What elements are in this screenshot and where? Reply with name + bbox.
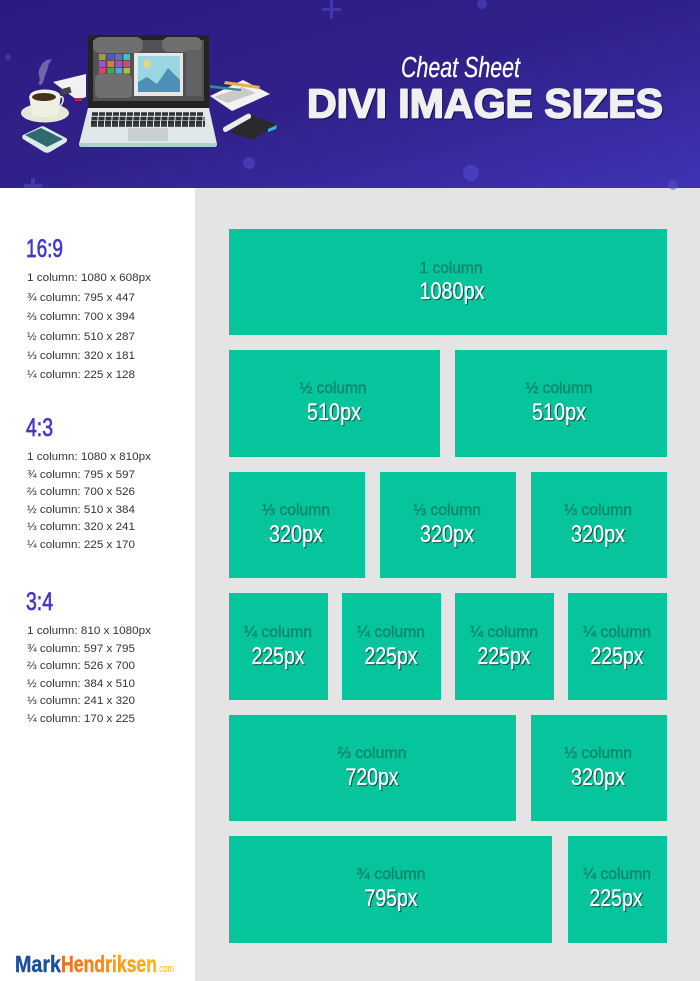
tile: 1/3 column first: ⅓ column: [262, 502, 330, 519]
list: 16:9 dimensions: ⅔ column: 700 x 394: [27, 311, 135, 323]
tile: 1/4 column beside 3/4: ¼ column: [583, 866, 651, 883]
tile: 1/3 column first: 320px: [269, 521, 323, 548]
panel: white sidebar background: [0, 188, 195, 981]
photo placeholder: [134, 53, 183, 96]
list: 16:9 dimensions: ¾ column: 795 x 447: [27, 292, 135, 304]
list: 4:3 dimensions: 1 column: 1080 x 810px: [27, 451, 151, 463]
list: 4:3 dimensions: ⅔ column: 700 x 526: [27, 486, 135, 498]
app icon grid: [99, 54, 130, 74]
icon: coffee cup: [21, 59, 69, 122]
tile: 1/4 column third: ¼ column: [470, 624, 538, 641]
panel: 4:3 sizes: [26, 414, 151, 551]
panel: 3:4 sizes: [26, 588, 151, 725]
tile: 1/3 column third: [531, 472, 667, 578]
list: 16:9 dimensions: ½ column: 510 x 287: [27, 331, 135, 343]
list: 3:4 dimensions: ⅔ column: 526 x 700: [27, 660, 135, 672]
illustration: laptop on desk: [21, 35, 277, 153]
tile: 1/2 column right: ½ column: [526, 380, 592, 397]
list: 3:4 dimensions: 1 column: 810 x 1080px: [27, 625, 151, 637]
list: 4:3 dimensions: ½ column: 510 x 384: [27, 504, 135, 516]
list: 4:3 dimensions: ¾ column: 795 x 597: [27, 469, 135, 481]
tile: 2/3 column: ⅔ column: [338, 745, 406, 762]
logo: MarkHendriksen.com: Hendriksen: [61, 951, 157, 977]
tile: 1/4 column second: ¼ column: [357, 624, 425, 641]
logo: MarkHendriksen.com: [15, 951, 174, 977]
tile: 1/3 column beside 2/3: 320px: [571, 764, 625, 791]
tile: 1/4 column first: [229, 593, 328, 700]
tile: 2/3 column: [229, 715, 516, 821]
icon: notepad: [53, 74, 86, 101]
tile: 1/2 column right: 510px: [532, 399, 586, 426]
list: 16:9 dimensions: ¼ column: 225 x 128: [27, 369, 135, 381]
list: 3:4 dimensions: ¾ column: 597 x 795: [27, 643, 135, 655]
icon: papers and pens: [210, 80, 270, 111]
tile: 1/4 column third: [455, 593, 554, 700]
heading: 16:9: 16:9: [26, 235, 63, 263]
tile: 1/2 column left: 510px: [307, 399, 361, 426]
keyboard: [91, 114, 205, 126]
tile: 1/3 column beside 2/3: ⅓ column: [564, 745, 632, 762]
list: 16:9 dimensions: [27, 272, 151, 381]
list: 16:9 dimensions: 1 column: 1080 x 608px: [27, 272, 151, 284]
tile: 1/2 column left: [229, 350, 440, 457]
list: 16:9 dimensions: ⅓ column: 320 x 181: [27, 350, 135, 362]
heading: DIVI IMAGE SIZES: DIVI IMAGE SIZES: [307, 80, 663, 126]
list: 4:3 dimensions: ¼ column: 225 x 170: [27, 539, 135, 551]
tile: 1/4 column first: ¼ column: [244, 624, 312, 641]
list: 3:4 dimensions: ⅓ column: 241 x 320: [27, 695, 135, 707]
tile: 3/4 column: ¾ column: [356, 866, 426, 883]
tile: 1/2 column left: ½ column: [300, 380, 366, 397]
icon: laptop: [79, 35, 217, 147]
tile: 1 column: 1 column: [420, 260, 482, 277]
icon: smartphone: [22, 126, 67, 153]
tile: 1/4 column third: 225px: [478, 643, 530, 670]
list: 4:3 dimensions: [27, 451, 151, 551]
heading: 3:4: 3:4: [26, 588, 53, 616]
list: 3:4 dimensions: [27, 625, 151, 725]
list: 3:4 dimensions: ½ column: 384 x 510: [27, 678, 135, 690]
tile: 1/3 column beside 2/3: [531, 715, 667, 821]
tile: 3/4 column: 795px: [364, 885, 418, 912]
tile: 1/2 column right: [455, 350, 667, 457]
logo: MarkHendriksen.com: Mark: [15, 951, 61, 977]
list: 4:3 dimensions: ⅓ column: 320 x 241: [27, 521, 135, 533]
tile: 1/4 column fourth: 225px: [590, 643, 644, 670]
header banner: [0, 0, 700, 190]
tile: 1/4 column fourth: [568, 593, 667, 700]
logo: MarkHendriksen.com: .com: [157, 963, 174, 975]
heading: 4:3: 4:3: [26, 414, 53, 442]
tile: 1/4 column first: 225px: [252, 643, 304, 670]
icon: closed notebook: [223, 114, 277, 140]
panel: 16:9 sizes: [26, 235, 151, 381]
list: 3:4 dimensions: ¼ column: 170 x 225: [27, 713, 135, 725]
tile: 1/3 column third: 320px: [571, 521, 625, 548]
tile: 1/3 column first: [229, 472, 365, 578]
tile: 1/3 column second: 320px: [420, 521, 474, 548]
tile: 3/4 column: [229, 836, 552, 943]
trackpad: [128, 128, 168, 141]
tile: 1/3 column third: ⅓ column: [564, 502, 632, 519]
tile: 1/4 column second: 225px: [364, 643, 418, 670]
tile: 1/4 column fourth: ¼ column: [583, 624, 651, 641]
tile: 1/3 column second: [380, 472, 516, 578]
tile: 1/4 column second: [342, 593, 441, 700]
tile: 1/3 column second: ⅓ column: [413, 502, 481, 519]
heading: Cheat Sheet: Cheat Sheet: [401, 52, 521, 84]
tile: 2/3 column: 720px: [346, 764, 398, 791]
tile: 1/4 column beside 3/4: 225px: [590, 885, 642, 912]
panel: gray tile area background: [195, 188, 700, 981]
tile: 1/4 column beside 3/4: [568, 836, 667, 943]
tile: 1 column: [229, 229, 667, 335]
tile: 1 column: 1080px: [420, 278, 484, 305]
